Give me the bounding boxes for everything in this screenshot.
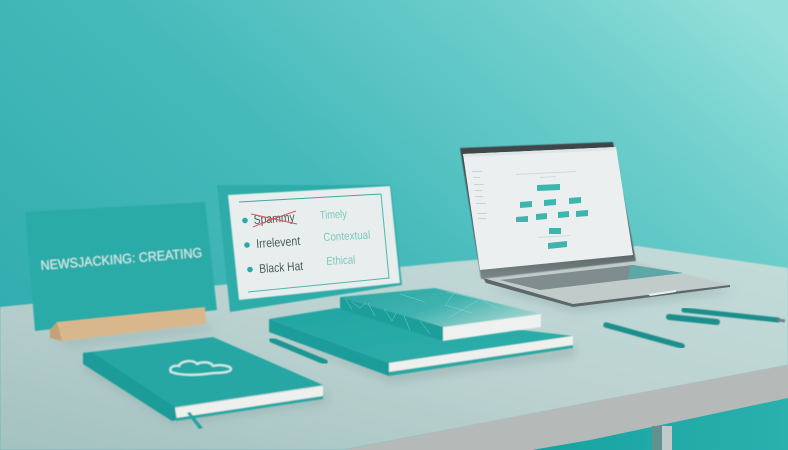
lid (460, 142, 636, 279)
desk (0, 246, 788, 450)
name card: newsjacking (25, 202, 217, 331)
cover pattern (345, 288, 500, 334)
bullets (242, 218, 253, 272)
pen 1 (606, 325, 682, 346)
large notebook (269, 308, 575, 382)
small pen (272, 340, 325, 362)
laptop shadow (490, 275, 735, 312)
right list: Timely (320, 209, 347, 222)
white panel (228, 186, 400, 300)
right list: Contextual (323, 230, 371, 244)
pen 3 (684, 310, 778, 320)
wooden stand (50, 307, 215, 346)
notebook shadow (275, 335, 575, 382)
screen sidebar (472, 171, 487, 219)
left list: Black Hat (259, 259, 304, 276)
trackpad notch (648, 290, 676, 296)
screen heading lines (516, 171, 576, 238)
pen 2 (669, 317, 717, 322)
bookmark ribbon (187, 412, 203, 429)
card title: NEWSJACKING: CREATING (40, 245, 203, 273)
left list: Irrelevent (256, 234, 301, 251)
left list: Spammy (253, 210, 296, 227)
keyboard (500, 265, 683, 290)
right pens (606, 310, 785, 346)
right list (320, 209, 371, 268)
screen (463, 147, 633, 270)
left list (253, 210, 304, 276)
base (483, 262, 730, 305)
panel right and bottom rule (248, 194, 389, 292)
comparison card (217, 185, 402, 312)
cloud icon (170, 361, 231, 375)
pen tip (778, 320, 785, 321)
cloud notebook (82, 337, 328, 429)
laptop (460, 142, 735, 312)
patterned notebook (340, 288, 541, 341)
notebook shadow (82, 360, 328, 424)
right list: Ethical (326, 254, 356, 268)
red strike-through (251, 211, 297, 227)
flowchart on screen (516, 184, 588, 249)
panel top rule (239, 194, 381, 202)
